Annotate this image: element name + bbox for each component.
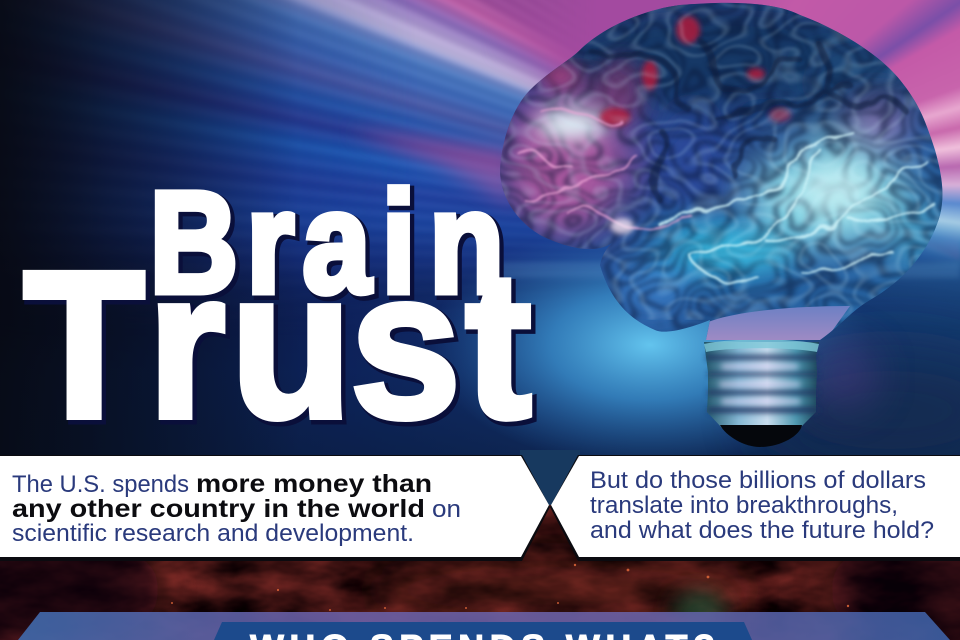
title shadow: Brain [153,166,507,326]
title shadow: Trust [27,231,534,464]
dark brain folds [590,40,905,200]
brain groove texture [495,0,945,345]
left statement text: any other country in the world [12,495,425,523]
background: light rays left [3,0,960,294]
right question text: and what does the future hold? [590,517,934,544]
bulb contact tip [720,425,802,447]
bulb neck [706,306,850,340]
background: nebula [0,505,960,640]
section banner: who spends what [18,612,950,640]
left statement text: The U.S. spends [12,471,189,498]
lightbulb screw base [704,340,819,447]
brain bulb [490,0,950,345]
background: pink streak and blue glow behind the bulb [0,0,960,510]
left statement text [12,470,461,547]
panel: left statement [0,455,550,561]
right question text: translate into breakthroughs, [590,492,898,519]
title word: Trust: Trust [24,228,531,461]
background: light rays right [518,0,960,297]
title: Brain Trust [24,163,534,464]
panel: right question [550,455,960,561]
right question text: But do those billions of dollars [590,467,926,494]
left statement text: scientific research and development. [12,520,414,547]
left statement text: more money than [196,470,432,498]
right question text [590,467,934,544]
pink brain veins [515,108,690,230]
left statement text: on [432,496,461,523]
red hot spots [600,16,791,126]
brain ridge texture [495,0,945,320]
title word: Brain: Brain [150,163,504,323]
bright brain veins [660,130,935,282]
